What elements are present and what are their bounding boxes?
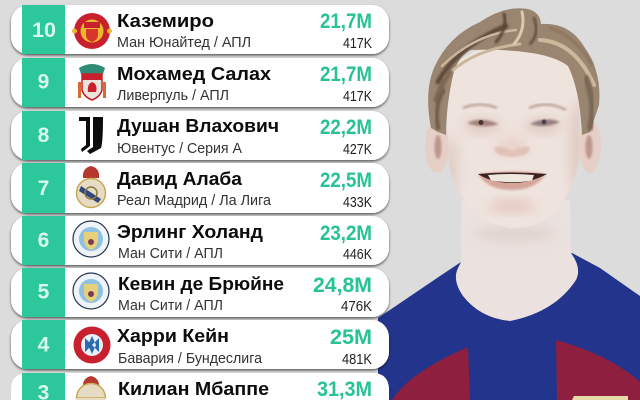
row 4: Kane: 25M bbox=[330, 326, 372, 349]
row 9: Salah: Ливерпуль / АПЛ bbox=[117, 87, 229, 104]
row 10: Casemiro: Каземиро bbox=[117, 10, 214, 31]
nose bbox=[494, 147, 530, 157]
row 7: Alaba bbox=[11, 163, 389, 213]
row 4: Kane: 4 bbox=[38, 334, 50, 356]
row 7: Alaba: 22,5M bbox=[320, 169, 372, 192]
icon: Manchester City crest bbox=[73, 273, 109, 309]
eyebrows bbox=[463, 104, 566, 110]
row 6: Haaland: 23,2M bbox=[320, 222, 372, 245]
row 5: De Bruyne: 24,8M bbox=[313, 274, 372, 297]
row 4: Kane: 481K bbox=[342, 352, 372, 368]
icon: Real Madrid crest bbox=[76, 166, 106, 208]
neck bbox=[456, 200, 578, 321]
row 9: Salah bbox=[11, 58, 389, 107]
icon: Bayern Munich crest bbox=[74, 326, 110, 364]
row 7: Alaba: 7 bbox=[38, 177, 49, 200]
row 6: Haaland: 446K bbox=[343, 247, 372, 263]
row 10: Casemiro: 10 bbox=[32, 19, 56, 42]
row 6: Haaland: Ман Сити / АПЛ bbox=[118, 245, 223, 262]
rank badge bbox=[22, 163, 65, 213]
rank badge bbox=[22, 320, 65, 369]
row 8: Vlahovic: Ювентус / Серия А bbox=[117, 140, 242, 157]
row 6: Haaland bbox=[11, 216, 389, 265]
rank badge bbox=[22, 373, 65, 400]
row 3: Mbappe bbox=[11, 373, 389, 400]
row 8: Vlahovic: 8 bbox=[38, 124, 50, 147]
icon: Juventus crest bbox=[79, 117, 103, 154]
row 10: Casemiro: 21,7M bbox=[320, 10, 372, 33]
face bbox=[446, 46, 580, 228]
rank badge bbox=[22, 5, 65, 54]
row 4: Kane bbox=[11, 320, 389, 369]
row 9: Salah: 417K bbox=[343, 89, 372, 105]
row 7: Alaba: Реал Мадрид / Ла Лига bbox=[117, 192, 272, 209]
row 10: Casemiro bbox=[11, 5, 389, 54]
row 7: Alaba: Давид Алаба bbox=[117, 168, 243, 189]
row 5: De Bruyne: 476K bbox=[341, 299, 372, 315]
player photo bbox=[378, 8, 640, 400]
ears bbox=[425, 119, 601, 173]
row 8: Vlahovic bbox=[11, 111, 389, 160]
icon: Manchester United crest bbox=[72, 13, 112, 49]
icon: Liverpool crest bbox=[78, 64, 106, 100]
icon: Real Madrid crest bbox=[76, 376, 106, 400]
icon: Manchester City crest bbox=[73, 221, 109, 257]
rank badge bbox=[22, 58, 65, 107]
row 5: De Bruyne: 5 bbox=[38, 280, 50, 304]
row 8: Vlahovic: 427K bbox=[343, 142, 372, 158]
row 4: Kane: Бавария / Бундеслига bbox=[118, 350, 263, 367]
row 3: Mbappe: Килиан Мбаппе bbox=[118, 378, 269, 399]
rank badge bbox=[22, 111, 65, 160]
eyes bbox=[467, 119, 560, 126]
rank badge bbox=[22, 268, 65, 317]
mouth bbox=[478, 172, 547, 190]
row 8: Vlahovic: Душан Влахович bbox=[117, 115, 279, 136]
row 5: De Bruyne: Ман Сити / АПЛ bbox=[118, 297, 223, 314]
row 7: Alaba: 433K bbox=[343, 195, 372, 211]
row 10: Casemiro: Ман Юнайтед / АПЛ bbox=[117, 34, 251, 51]
row 5: De Bruyne: Кевин де Брюйне bbox=[118, 273, 284, 294]
row 9: Salah: 21,7M bbox=[320, 63, 372, 86]
hair bbox=[428, 8, 599, 135]
rank badge bbox=[22, 216, 65, 265]
row 4: Kane: Харри Кейн bbox=[117, 325, 229, 346]
row 10: Casemiro: 417K bbox=[343, 36, 372, 52]
shirt bbox=[378, 253, 640, 400]
row 6: Haaland: 6 bbox=[38, 229, 49, 252]
row 6: Haaland: Эрлинг Холанд bbox=[117, 221, 263, 242]
row 9: Salah: Мохамед Салах bbox=[117, 63, 272, 84]
row 9: Salah: 9 bbox=[38, 70, 49, 94]
row 5: De Bruyne bbox=[11, 268, 389, 317]
row 8: Vlahovic: 22,2M bbox=[320, 116, 372, 139]
